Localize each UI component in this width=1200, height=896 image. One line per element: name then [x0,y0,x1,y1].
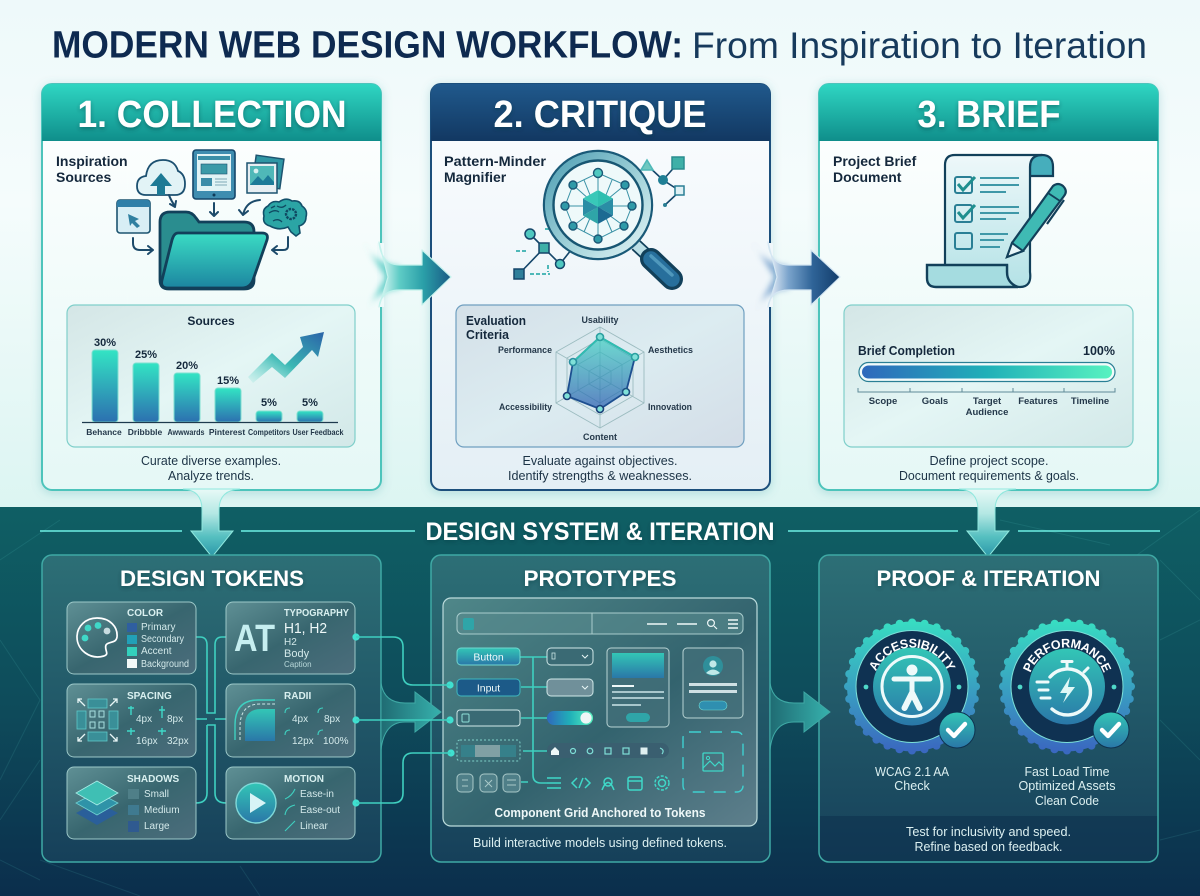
card: typography: Body [284,648,310,660]
caption: proof and iteration: Refine based on feedback. [914,840,1062,854]
icon: radius corner [235,700,275,741]
caption: brief: Document requirements & goals. [899,469,1079,483]
caption: critique: Identify strengths & weaknesses. [508,469,692,483]
card: motion: Linear [300,821,328,832]
radar chart: Accessibility [499,402,553,413]
card: spacing: SPACING [127,691,172,702]
caption: brief [899,454,1079,483]
title: From Inspiration to Iteration [692,25,1147,66]
radar chart [498,315,693,443]
card: radii: 100% [323,736,349,747]
component: dropdowns and toggle [547,648,593,725]
card: radii: 8px [324,714,340,725]
text: wcag check [875,765,950,793]
progress steps: Target [973,396,1002,407]
progress steps [858,388,1115,418]
heading: prototypes: PROTOTYPES [524,566,676,591]
card: radii: RADII [284,691,311,702]
card: motion: MOTION [284,774,324,785]
card: typography: Caption [284,660,312,669]
preview card [607,648,669,727]
heading: proof and iteration: PROOF & ITERATION [876,566,1100,591]
icon: spacing grid [77,699,118,741]
panel: brief [819,84,1158,490]
card: spacing: 4px [136,714,152,725]
bar chart: 25% [135,349,157,361]
component: button: Button [473,652,504,664]
bar chart: Pinterest [209,427,245,437]
chart title: Sources [187,314,235,328]
card: typography: H1, H2 [284,620,327,637]
progress bar [859,362,1115,382]
card: color: Secondary [141,634,184,645]
component: icon pill [547,743,669,758]
card: typography: AT [234,618,275,660]
header: critique [431,84,770,141]
progress steps: Scope [869,396,897,407]
caption: collection: Curate diverse examples. [141,454,281,468]
icon: play button [236,783,276,823]
nav bar [457,613,743,634]
card: motion: Ease-out [300,805,340,816]
badge: performance: PERFORMANCE [1022,638,1112,673]
component: slider [447,740,520,761]
card: spacing: 8px [167,714,183,725]
arrow: prototypes to proof [770,683,830,750]
connectors: tokens to components [352,633,451,807]
bar chart: 5% [261,397,277,409]
card: motion [226,767,355,839]
section heading: design system and iteration: DESIGN SYSTEM & ITERATION [426,518,774,546]
panel: design tokens [42,555,381,862]
background: dark lower section [0,507,1200,896]
panel: prototypes [431,555,770,862]
card: radii: 12px [292,736,314,747]
heading: design tokens: DESIGN TOKENS [120,566,304,591]
caption: brief: Define project scope. [930,454,1048,468]
text: performance checks: Optimized Assets [1018,779,1116,793]
radar chart: Innovation [648,402,692,413]
header: brief [819,84,1158,141]
profile card [683,648,743,718]
title [52,24,1147,66]
bar chart: Behance [86,427,122,437]
caption: prototypes: Build interactive models using defined tokens. [473,836,727,850]
component: icon buttons [457,774,520,792]
text: wcag check: WCAG 2.1 AA [875,765,950,779]
card: color: Accent [141,646,172,657]
icon: inspiration folder cluster [117,150,306,289]
trend arrow [248,332,324,383]
token connectors [196,637,226,803]
label: pattern-minder magnifier: Pattern-Minder [444,153,547,169]
label: pattern-minder magnifier: Magnifier [444,169,507,185]
card: typography: H2 [284,637,297,648]
text: wcag check: Check [894,779,930,793]
bar chart: User Feedback [292,427,344,437]
label: inspiration sources: Inspiration [56,153,128,169]
arrow: brief down to proof [959,489,1016,557]
label: project brief document: Document [833,169,902,185]
caption: critique: Evaluate against objectives. [522,454,678,468]
card: typography [226,602,355,674]
bar chart: 5% [302,397,318,409]
bar chart: 15% [217,375,239,387]
chart card: sources [67,305,355,483]
bar chart: 20% [176,360,198,372]
bar chart: Awwwards [168,427,205,437]
arrow: collection to critique [364,242,451,311]
header: critique: 2. CRITIQUE [494,94,706,136]
component: button [457,648,520,665]
progress label [858,344,1115,358]
badge: accessibility: ACCESSIBILITY [870,638,956,672]
panel: proof and iteration [818,554,1159,863]
bar chart: Competitors [248,427,290,437]
progress steps: Timeline [1071,396,1109,407]
text: performance checks: Clean Code [1035,794,1099,808]
card: color: Background [141,659,189,670]
card: spacing [67,684,196,757]
label: project brief document: Project Brief [833,153,917,169]
card: color: COLOR [127,608,164,619]
caption: component grid: Component Grid Anchored to Tokens [494,805,706,820]
component: locked field [446,710,520,726]
label: evaluation criteria: Evaluation [466,314,526,328]
header: collection: 1. COLLECTION [78,94,346,136]
caption: proof and iteration [906,825,1071,854]
arrow: collection down to design tokens [183,489,240,557]
progress steps: Features [1018,396,1058,407]
card: evaluation criteria [456,305,744,447]
caption: collection [141,454,281,483]
badge: accessibility [844,618,980,754]
footer band [819,816,1158,862]
radar chart: Performance [498,345,552,356]
caption: critique [508,454,692,483]
header: brief: 3. BRIEF [918,94,1060,136]
card: radii: 4px [292,714,308,725]
card: brief completion [844,305,1133,447]
bar chart [82,337,344,437]
icon: brief document and pen [927,155,1066,287]
card: typography: TYPOGRAPHY [284,608,349,619]
caption: collection: Analyze trends. [168,469,254,483]
card: shadows: Small [144,789,169,800]
text: performance checks [1018,765,1116,808]
card: shadows [67,767,196,839]
bar chart: 30% [94,337,116,349]
card: color [67,602,196,674]
label: inspiration sources: Sources [56,169,111,185]
card: spacing: 32px [167,736,189,747]
progress steps: Goals [922,396,948,407]
title: MODERN WEB DESIGN WORKFLOW: [52,24,683,66]
arrow: critique to brief [753,242,840,311]
background: light upper section [0,0,1200,507]
label: evaluation criteria: Criteria [466,328,510,342]
card: radii [226,684,355,757]
card: shadows: Medium [144,805,180,816]
icon: layers [76,781,118,825]
panel: critique [431,84,770,490]
card: spacing: 16px [136,736,158,747]
text: performance checks: Fast Load Time [1024,765,1110,779]
badge: performance [999,618,1135,754]
card: shadows: Large [144,821,170,832]
component: input: Input [477,682,500,694]
progress label: 100% [1083,344,1115,358]
image placeholder [683,732,743,792]
radar chart: Content [583,432,618,443]
card: component grid [443,598,757,826]
component connectors [520,657,547,783]
bar chart: Dribbble [128,427,163,437]
card: motion: Ease-in [300,789,334,800]
component: input [446,679,520,696]
icon: magnifier with network [514,151,684,279]
card: color: Primary [141,622,175,633]
caption: proof and iteration: Test for inclusivity and speed. [906,825,1071,839]
progress steps: Audience [966,407,1008,418]
card: shadows: SHADOWS [127,774,180,785]
radar chart: Usability [582,315,619,326]
progress label: Brief Completion [858,344,955,358]
icon: palette [77,618,117,657]
header: collection [42,84,381,141]
arrow: tokens to prototypes [381,683,441,750]
radar chart: Aesthetics [648,345,693,356]
component: icon row [547,776,669,790]
